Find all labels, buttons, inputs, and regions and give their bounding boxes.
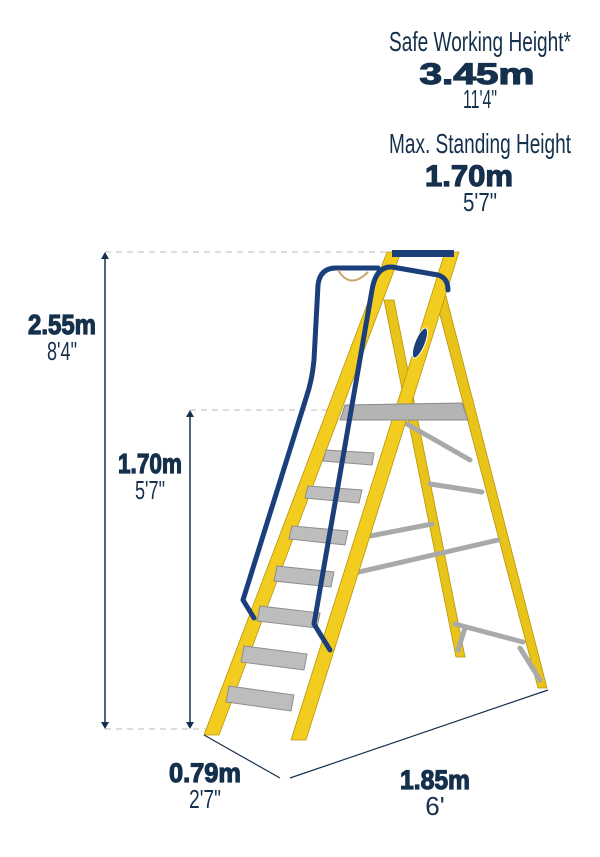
heading: max standing height: 5'7"	[463, 187, 497, 217]
blue handrails	[243, 267, 448, 650]
dimension: depth 1.85m	[290, 690, 548, 821]
dashed guides	[105, 252, 430, 729]
dimension: total height 2.55m: 8'4"	[47, 336, 77, 366]
heading: safe working height: 3.45m	[420, 58, 534, 91]
platform	[340, 403, 468, 420]
logo badge	[409, 326, 431, 360]
heading: max standing height	[389, 128, 571, 217]
chain	[338, 270, 368, 281]
heading: safe working height	[389, 26, 571, 114]
dimension: platform height 1.70m: 5'7"	[135, 475, 165, 505]
back ladder rails	[350, 296, 547, 688]
dimension: total height 2.55m	[28, 252, 109, 729]
back braces	[350, 420, 540, 680]
front ladder rails	[204, 250, 459, 740]
dimension: depth 1.85m: 1.85m	[400, 765, 470, 795]
dimension: total height 2.55m: 2.55m	[28, 309, 96, 340]
heading: max standing height: 1.70m	[425, 160, 513, 193]
steps	[226, 450, 374, 711]
dimension: depth 1.85m: 6'	[425, 791, 445, 821]
dimension: platform height 1.70m: 1.70m	[118, 448, 182, 479]
ladder illustration	[204, 250, 547, 740]
dimension: width 0.79m: 2'7"	[189, 784, 221, 814]
dimension: width 0.79m	[169, 735, 280, 814]
dimension: width 0.79m: 0.79m	[169, 758, 241, 788]
dimension: platform height 1.70m	[118, 410, 194, 729]
heading: safe working height: 11'4"	[463, 84, 497, 114]
